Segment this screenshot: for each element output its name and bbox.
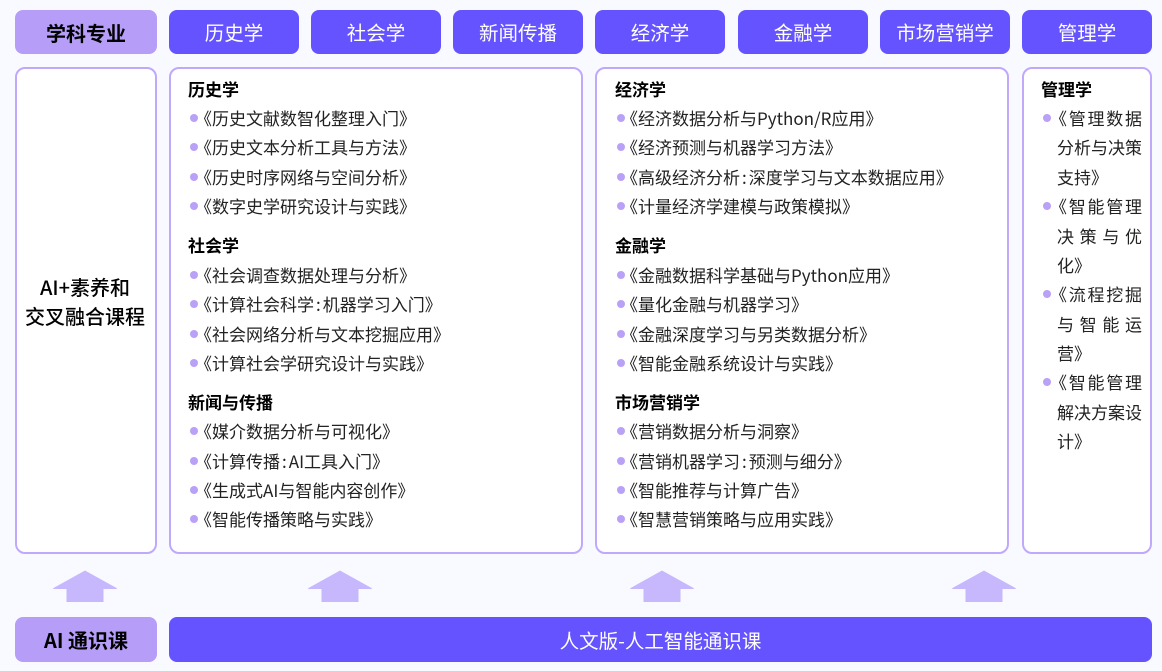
course: 流程挖掘与智能运营 bbox=[1043, 281, 1142, 365]
label: AI 通识课: AI 通识课 bbox=[44, 625, 128, 654]
course: 《计算社会科学:机器学习入门》 bbox=[195, 291, 442, 316]
header: 新闻传播 bbox=[453, 10, 583, 54]
course: 《社会网络分析与文本挖掘应用》 bbox=[195, 321, 450, 346]
header: 社会学: 社会学 bbox=[347, 17, 405, 46]
bar: 人文版-人工智能通识课 bbox=[169, 617, 1152, 662]
course: 《智慧营销策略与应用实践》 bbox=[621, 506, 842, 531]
course: 《计算传播:AI工具入门》 bbox=[195, 448, 389, 473]
header: 管理学: 管理学 bbox=[1058, 17, 1116, 46]
arrow 4 bbox=[952, 570, 1016, 602]
course: 管理数据分析与决策支持: 分析与决策 bbox=[1057, 134, 1142, 159]
course: 流程挖掘与智能运营: 营》 bbox=[1057, 340, 1091, 365]
course: 智能管理决策与优化: 决策与优 bbox=[1057, 223, 1142, 248]
panel: AI+素养和交叉融合课程: 交叉融合课程 bbox=[25, 301, 145, 330]
course: 《计算社会学研究设计与实践》 bbox=[195, 350, 433, 375]
panel: AI+素养和交叉融合课程: AI+素养和 bbox=[40, 272, 130, 300]
course: 《营销数据分析与洞察》 bbox=[621, 418, 808, 443]
course: 流程挖掘与智能运营: 与智能运 bbox=[1057, 311, 1142, 336]
course: 《金融深度学习与另类数据分析》 bbox=[621, 321, 876, 346]
heading: 管理学: 管理学 bbox=[1041, 76, 1092, 101]
course: 《社会调查数据处理与分析》 bbox=[195, 262, 416, 287]
course: 智能管理解决方案设计: 解决方案设 bbox=[1057, 399, 1142, 424]
heading: 市场营销学: 市场营销学 bbox=[615, 389, 700, 414]
course: 《生成式AI与智能内容创作》 bbox=[195, 477, 414, 502]
header: 历史学 bbox=[169, 10, 299, 54]
panel: 管理学 bbox=[1022, 67, 1152, 554]
course: 《历史时序网络与空间分析》 bbox=[195, 164, 416, 189]
course: 智能管理解决方案设计: 《智能管理 bbox=[1050, 369, 1142, 394]
bar: 人文版-人工智能通识课: 人文版-人工智能通识课 bbox=[560, 624, 761, 654]
course: 《历史文本分析工具与方法》 bbox=[195, 134, 416, 159]
course: 管理数据分析与决策支持 bbox=[1043, 105, 1142, 189]
course: 《计量经济学建模与政策模拟》 bbox=[621, 193, 859, 218]
course: 智能管理解决方案设计 bbox=[1043, 369, 1142, 453]
header: 管理学 bbox=[1022, 10, 1152, 54]
header: 经济学 bbox=[595, 10, 725, 54]
panel: 经济学 金融学 市场营销学 bbox=[595, 67, 1009, 554]
course: 《智能推荐与计算广告》 bbox=[621, 477, 808, 502]
course: 《金融数据科学基础与Python应用》 bbox=[621, 262, 899, 287]
panel: 历史学 社会学 新闻与传播 bbox=[169, 67, 583, 554]
course: 流程挖掘与智能运营: 《流程挖掘 bbox=[1050, 281, 1142, 306]
course: 智能管理决策与优化: 化》 bbox=[1057, 252, 1091, 277]
header: 市场营销学 bbox=[880, 10, 1010, 54]
header: 学科专业: 学科专业 bbox=[46, 18, 126, 46]
course: 《量化金融与机器学习》 bbox=[621, 291, 808, 316]
heading: 新闻与传播: 新闻与传播 bbox=[188, 389, 273, 414]
heading: 金融学: 金融学 bbox=[615, 232, 666, 257]
header: 金融学 bbox=[738, 10, 868, 54]
course: 《历史文献数智化整理入门》 bbox=[195, 105, 416, 130]
arrow 1 bbox=[53, 570, 117, 602]
course: 《经济数据分析与Python/R应用》 bbox=[621, 105, 882, 130]
panel: AI+素养和交叉融合课程 bbox=[15, 67, 157, 554]
heading: 历史学: 历史学 bbox=[188, 76, 239, 101]
heading: 经济学: 经济学 bbox=[615, 76, 666, 101]
course: 智能管理解决方案设计: 计》 bbox=[1057, 428, 1091, 453]
header: 历史学: 历史学 bbox=[205, 17, 263, 46]
header: 学科专业 bbox=[15, 10, 157, 54]
course: 智能管理决策与优化 bbox=[1043, 193, 1142, 277]
course: 《营销机器学习:预测与细分》 bbox=[621, 448, 851, 473]
course: 《数字史学研究设计与实践》 bbox=[195, 193, 416, 218]
header: 金融学: 金融学 bbox=[774, 17, 832, 46]
course: 《智能金融系统设计与实践》 bbox=[621, 350, 842, 375]
course: 《经济预测与机器学习方法》 bbox=[621, 134, 842, 159]
heading: 社会学: 社会学 bbox=[188, 232, 239, 257]
course: 《高级经济分析:深度学习与文本数据应用》 bbox=[621, 164, 953, 189]
course: 管理数据分析与决策支持: 《管理数据 bbox=[1050, 105, 1142, 130]
header: 社会学 bbox=[311, 10, 441, 54]
arrow 2 bbox=[308, 570, 372, 602]
label: AI 通识课 bbox=[15, 617, 157, 662]
course: 《媒介数据分析与可视化》 bbox=[195, 418, 399, 443]
header: 经济学: 经济学 bbox=[631, 17, 689, 46]
header: 新闻传播: 新闻传播 bbox=[479, 17, 557, 46]
course: 智能管理决策与优化: 《智能管理 bbox=[1050, 193, 1142, 218]
course: 管理数据分析与决策支持: 支持》 bbox=[1057, 164, 1108, 189]
course: 《智能传播策略与实践》 bbox=[195, 506, 382, 531]
header: 市场营销学: 市场营销学 bbox=[896, 17, 994, 46]
arrow 3 bbox=[630, 570, 694, 602]
